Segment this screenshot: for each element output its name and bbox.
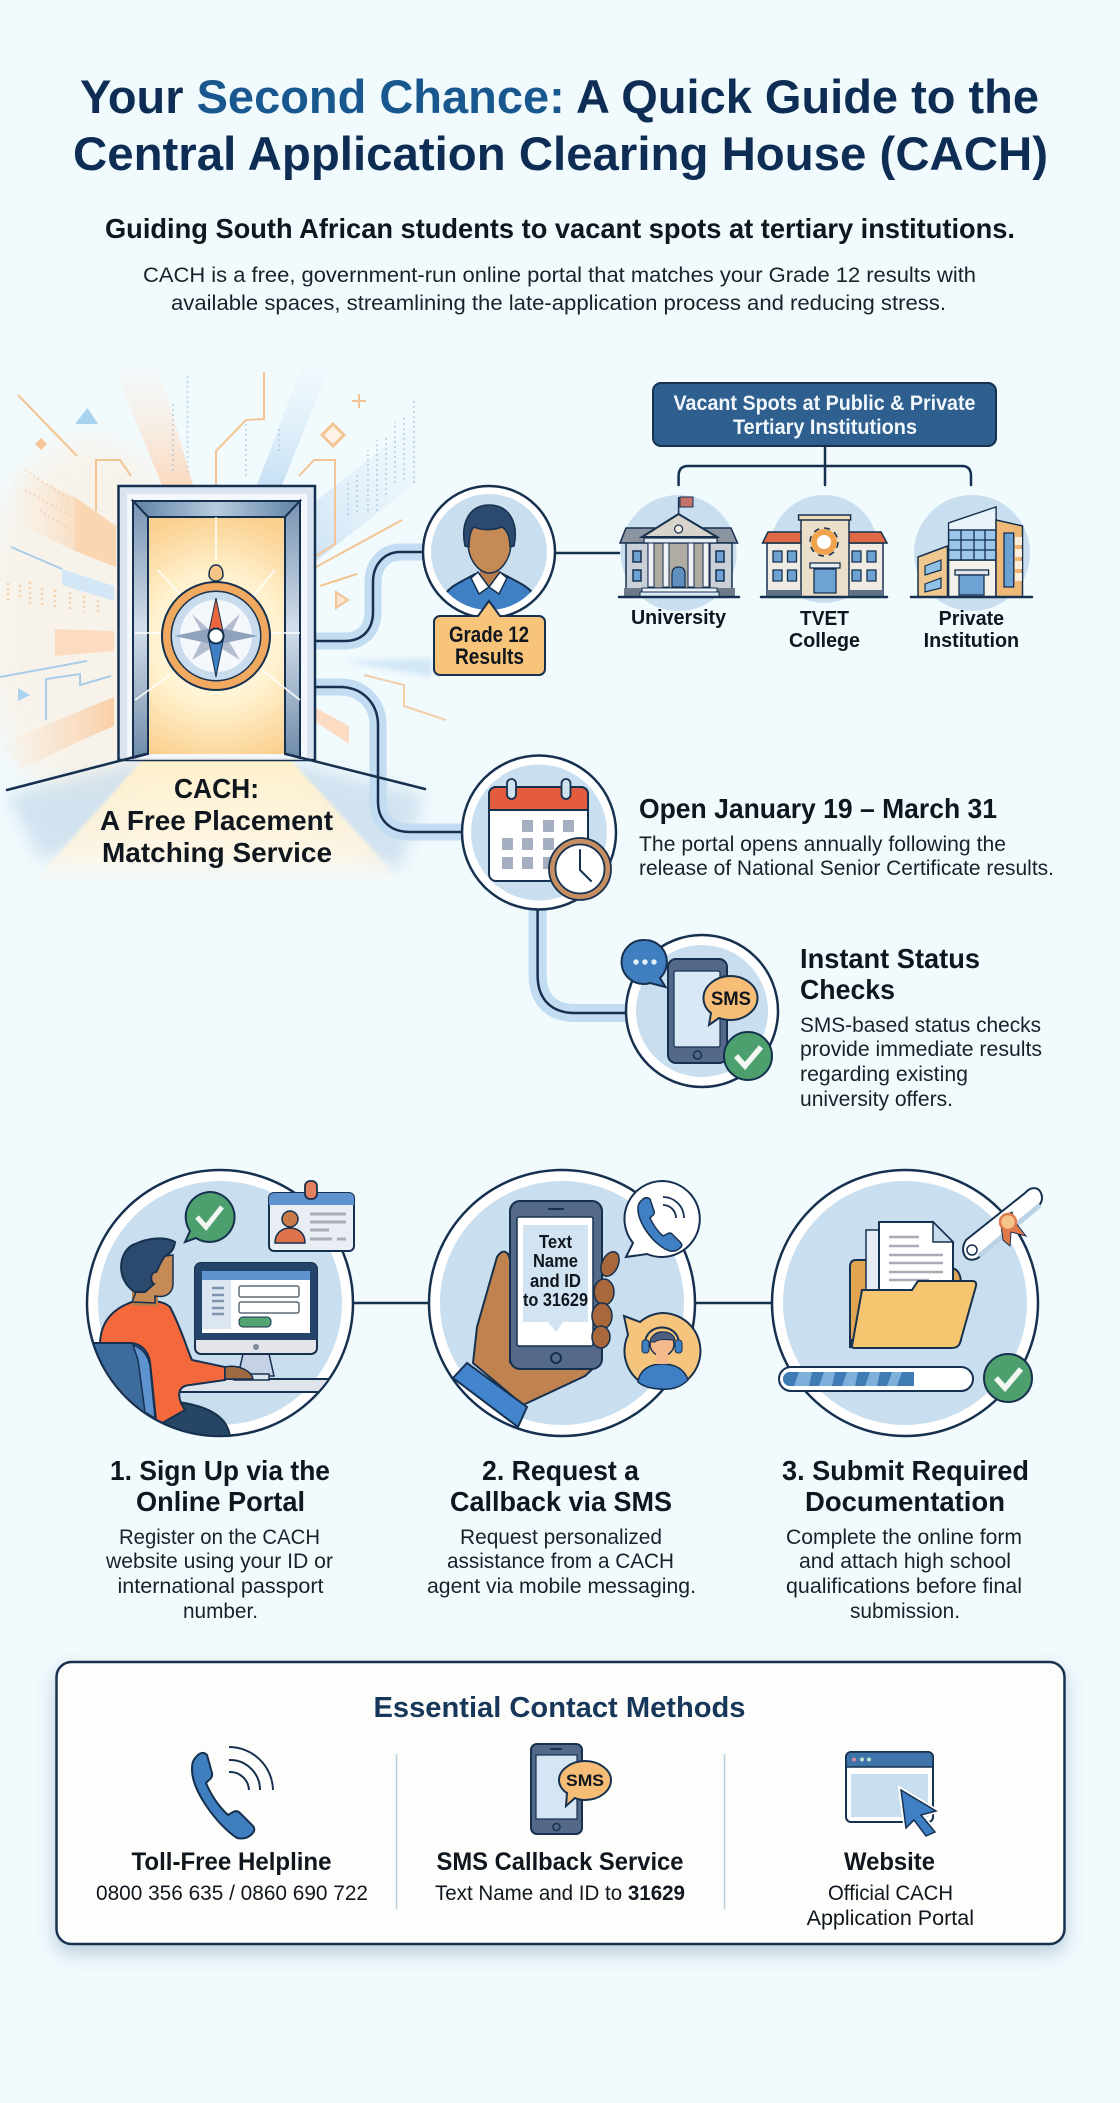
helpline text bbox=[96, 1848, 368, 1905]
text on phone: Text bbox=[539, 1232, 572, 1252]
title: Central Application Clearing House (CACH) bbox=[73, 127, 1048, 180]
label: private institution: Private bbox=[939, 608, 1004, 630]
step 1 text bbox=[105, 1455, 333, 1623]
step 1 text: Online Portal bbox=[136, 1486, 305, 1517]
step 2 text bbox=[427, 1455, 696, 1598]
step 2 illustration bbox=[429, 1170, 700, 1436]
badge: Grade 12 Results bbox=[434, 601, 545, 675]
icon: diploma bbox=[963, 1188, 1042, 1260]
label: private institution: Institution bbox=[924, 630, 1019, 652]
icon: success check bbox=[984, 1354, 1032, 1402]
dividers bbox=[396, 1754, 724, 1909]
icon: ID card bbox=[269, 1181, 354, 1251]
website text: Website bbox=[844, 1848, 935, 1876]
text: instant status: SMS-based status checks bbox=[800, 1013, 1041, 1037]
step 1 illustration bbox=[87, 1170, 354, 1440]
decorative burst behind door bbox=[0, 361, 446, 800]
door portal bbox=[7, 486, 425, 790]
text: instant status: regarding existing bbox=[800, 1062, 968, 1086]
icon: call bubble bbox=[624, 1181, 700, 1257]
door caption: CACH: bbox=[174, 773, 259, 804]
title: Your Second Chance: A Quick Guide to the bbox=[80, 70, 1039, 123]
label: TVET college: TVET bbox=[800, 608, 849, 630]
icon: SMS status check: SMS bbox=[711, 989, 751, 1010]
helpline text: Toll-Free Helpline bbox=[132, 1848, 332, 1876]
website text: Application Portal bbox=[807, 1907, 974, 1930]
step 3 text bbox=[782, 1455, 1029, 1623]
step 2 text: Callback via SMS bbox=[450, 1486, 672, 1517]
text: open dates: Open January 19 – March 31 bbox=[639, 793, 997, 824]
text: instant status bbox=[800, 943, 1042, 1111]
step 2 text: Request personalized bbox=[460, 1525, 662, 1549]
text: instant status: Instant Status bbox=[800, 943, 980, 974]
step 1 text: international passport bbox=[118, 1574, 324, 1598]
step 3 text: submission. bbox=[850, 1599, 960, 1623]
floor shadows bbox=[7, 760, 425, 870]
subtitle: Guiding South African students to vacant spots at tertiary institutions. bbox=[105, 213, 1015, 244]
step 3 text: Complete the online form bbox=[786, 1525, 1022, 1549]
step 3 illustration bbox=[772, 1170, 1042, 1436]
text on phone bbox=[523, 1232, 588, 1310]
door caption: A Free Placement bbox=[100, 805, 333, 836]
label: private institution bbox=[924, 608, 1019, 652]
label: university: University bbox=[631, 607, 727, 629]
icon: hand with phone bbox=[453, 1201, 623, 1427]
step 2 text: assistance from a CACH bbox=[447, 1549, 674, 1573]
lines between steps bbox=[353, 1302, 772, 1304]
text: open dates: release of National Senior Certificate results. bbox=[639, 856, 1054, 880]
helpline text: 0800 356 635 / 0860 690 722 bbox=[96, 1882, 368, 1905]
light cone on floor bbox=[30, 754, 405, 885]
person at computer bbox=[90, 1238, 253, 1440]
intro text: CACH is a free, government-run online portal that matches your Grade 12 results with bbox=[143, 263, 976, 287]
icon: TVET college bbox=[761, 495, 887, 603]
intro text bbox=[143, 263, 976, 315]
icon: SMS status check bbox=[622, 935, 778, 1087]
panel: vacant spots: Tertiary Institutions bbox=[733, 416, 917, 439]
line: student to university bbox=[555, 552, 619, 554]
icon: folder with documents bbox=[850, 1222, 976, 1348]
door caption: Matching Service bbox=[102, 837, 332, 868]
text: open dates bbox=[639, 793, 1054, 880]
step 2 text: 2. Request a bbox=[482, 1455, 639, 1486]
SMS callback text: Text Name and ID to 31629 bbox=[435, 1882, 685, 1905]
text: instant status: university offers. bbox=[800, 1087, 953, 1111]
text: instant status: Checks bbox=[800, 974, 895, 1005]
icon: phone bbox=[192, 1747, 273, 1838]
text: open dates: The portal opens annually following the bbox=[639, 832, 1006, 856]
icon: confirmation bubble bbox=[185, 1192, 235, 1242]
panel: essential contact methods bbox=[56, 1662, 1064, 1944]
icon: private institution bbox=[911, 495, 1032, 611]
SMS callback text: SMS Callback Service bbox=[436, 1848, 684, 1876]
step 1 text: 1. Sign Up via the bbox=[110, 1455, 330, 1486]
badge: Grade 12 Results: Results bbox=[455, 644, 524, 669]
website text bbox=[807, 1848, 974, 1930]
door caption bbox=[100, 773, 333, 868]
icon: agent bbox=[624, 1313, 700, 1389]
step 3 text: qualifications before final bbox=[786, 1574, 1022, 1598]
icon: SMS phone bbox=[531, 1744, 611, 1834]
badge: Grade 12 Results: Grade 12 bbox=[449, 622, 529, 647]
step 1 text: website using your ID or bbox=[105, 1549, 333, 1573]
step 3 text: and attach high school bbox=[799, 1549, 1011, 1573]
heading: Essential Contact Methods bbox=[374, 1692, 746, 1724]
panel: vacant spots: Vacant Spots at Public & Private bbox=[674, 392, 976, 415]
header bbox=[73, 70, 1048, 315]
text: instant status: provide immediate results bbox=[800, 1037, 1042, 1061]
text on phone: to 31629 bbox=[523, 1290, 588, 1310]
step 1 text: number. bbox=[183, 1599, 258, 1623]
connector bracket bbox=[679, 446, 971, 485]
SMS callback text bbox=[435, 1848, 685, 1905]
intro text: available spaces, streamlining the late-application process and reducing stress. bbox=[171, 291, 946, 315]
text on phone: Name bbox=[533, 1251, 578, 1271]
icon: student bbox=[423, 486, 555, 618]
step 1 text: Register on the CACH bbox=[119, 1525, 320, 1549]
icon: university bbox=[619, 495, 739, 611]
title bbox=[73, 70, 1048, 180]
icon: SMS phone: SMS bbox=[566, 1771, 604, 1790]
icon: website bbox=[846, 1752, 936, 1836]
step 3 text: Documentation bbox=[805, 1486, 1005, 1517]
connector: calendar to SMS bbox=[538, 909, 626, 1013]
label: TVET college: College bbox=[789, 630, 860, 652]
icon: computer bbox=[195, 1263, 317, 1376]
progress bar bbox=[779, 1367, 973, 1391]
panel: vacant spots bbox=[653, 383, 996, 446]
connector: door to calendar bbox=[315, 687, 462, 832]
icon: calendar and clock bbox=[462, 756, 616, 910]
website text: Official CACH bbox=[828, 1882, 953, 1905]
icon: compass bbox=[162, 565, 270, 690]
step 3 text: 3. Submit Required bbox=[782, 1455, 1029, 1486]
step 2 text: agent via mobile messaging. bbox=[427, 1574, 696, 1598]
desk bbox=[175, 1374, 330, 1392]
label: TVET college bbox=[789, 608, 860, 652]
connector: door to Grade 12 results bbox=[315, 552, 423, 641]
text on phone: and ID bbox=[530, 1271, 581, 1291]
